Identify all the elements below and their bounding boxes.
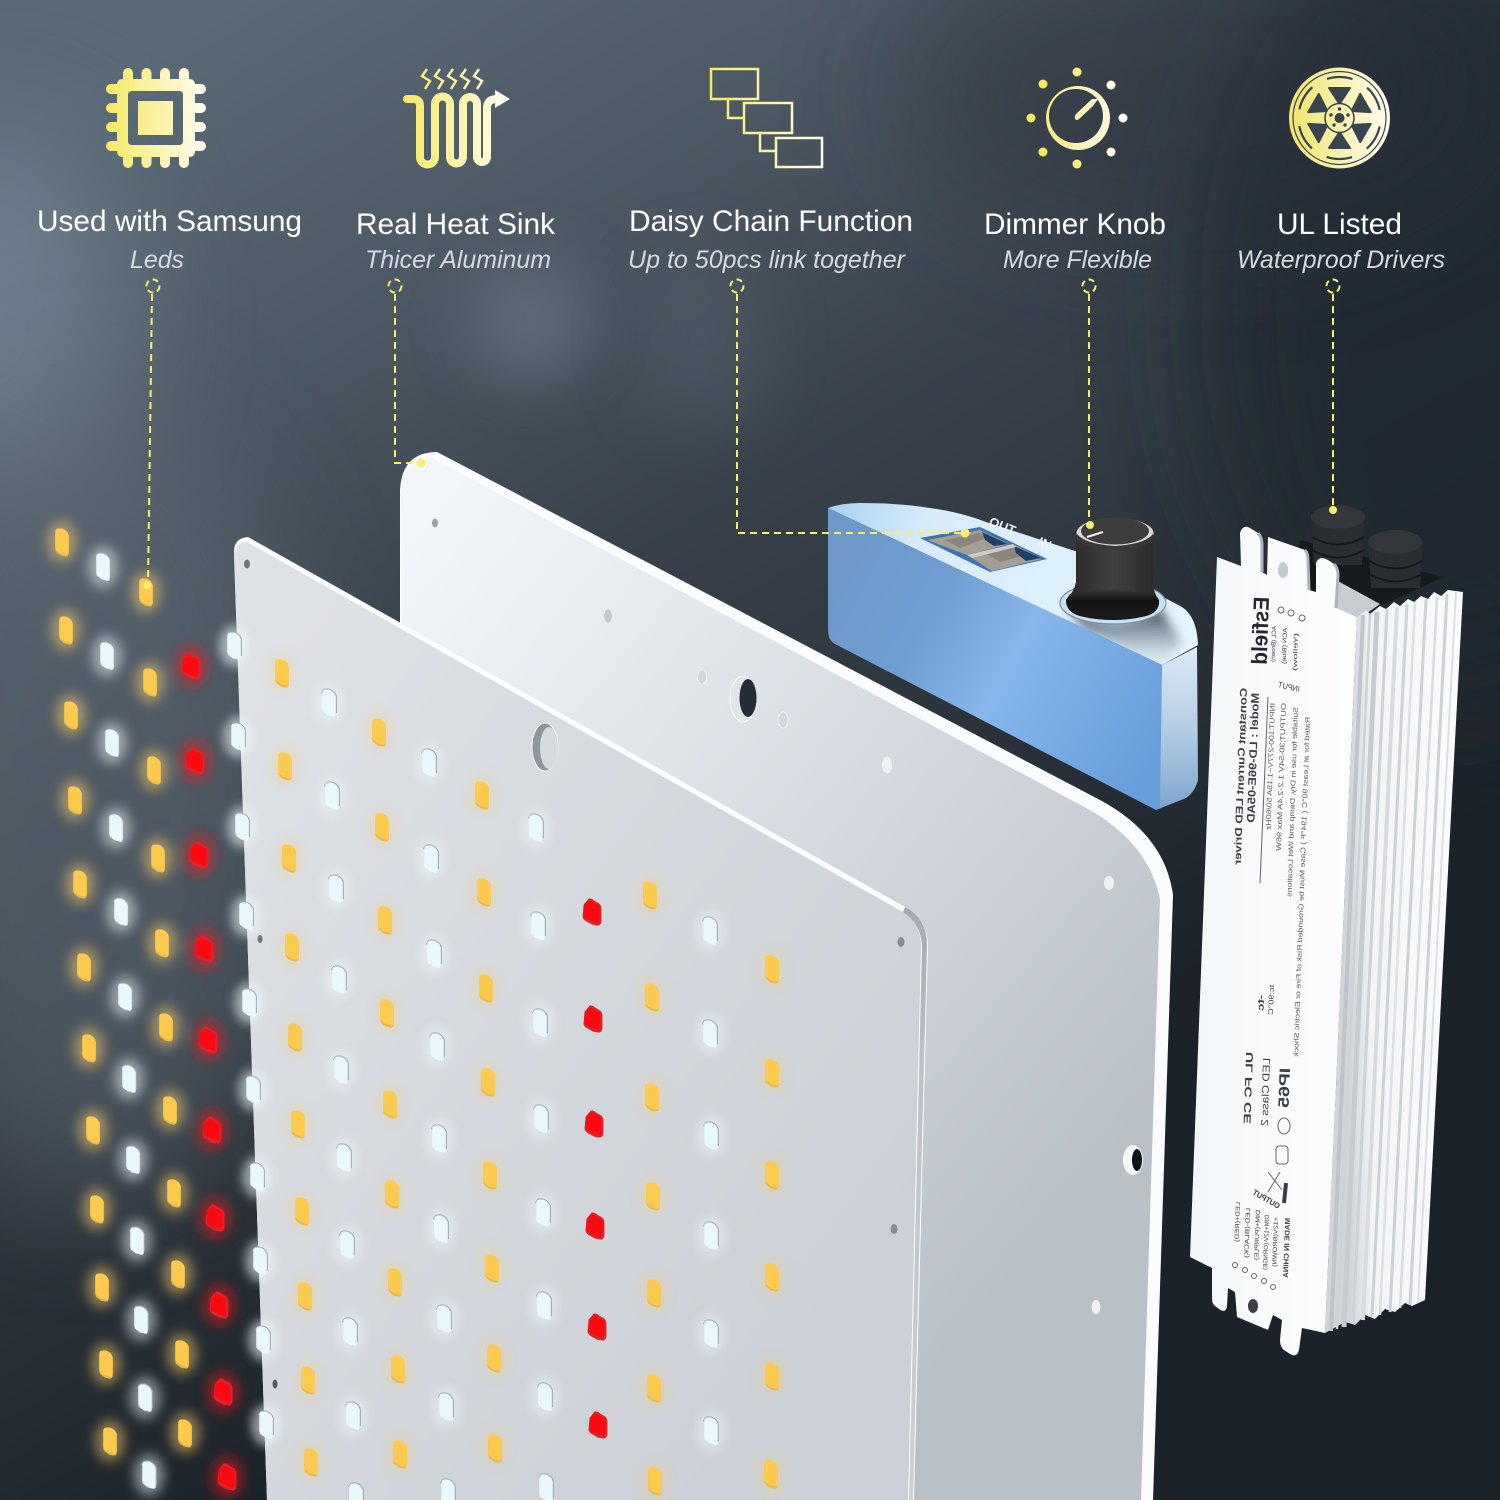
heading: UL Listed: UL Listed bbox=[1277, 208, 1402, 241]
icon: wheel bbox=[1289, 68, 1390, 168]
front panel holes bbox=[244, 560, 904, 1388]
panel LEDs bbox=[275, 660, 779, 1500]
driver label text: IP65 bbox=[1276, 1068, 1294, 1108]
leader: daisy chain bbox=[730, 280, 968, 536]
driver label text: Esfield bbox=[1247, 596, 1274, 665]
LED driver bbox=[1190, 505, 1463, 1355]
ethernet ports bbox=[920, 527, 1047, 572]
driver label text: OUTPUT:30-54V 1.2-2.4A Max 96W bbox=[1276, 703, 1288, 851]
driver label text: DIM+(PURPLE) bbox=[1254, 1210, 1262, 1260]
mounting hole bottom bbox=[1248, 1299, 1258, 1313]
LEDs floating left of panel bbox=[47, 521, 243, 1498]
controller top face bbox=[828, 503, 1198, 665]
leader: heat sink bbox=[388, 280, 424, 466]
heading: Dimmer Knob: Dimmer Knob bbox=[984, 208, 1166, 241]
icon: dimmer knob bbox=[1026, 68, 1128, 168]
subheading: More Flexible: More Flexible bbox=[1003, 246, 1152, 274]
controller side face bbox=[1156, 647, 1198, 810]
front LED panel bbox=[219, 537, 928, 1500]
driver label text bbox=[1233, 596, 1312, 1278]
driver label text: INPUT:100-277V~1.15A 50/60Hz bbox=[1266, 703, 1277, 831]
controller front face bbox=[828, 508, 1162, 810]
leader: dimmer knob bbox=[1082, 280, 1096, 528]
knob base ring bbox=[1060, 582, 1166, 624]
driver label text: LED+(RED) bbox=[1235, 1202, 1242, 1242]
blue controller box bbox=[828, 503, 1198, 810]
driver metal shoulder bbox=[1334, 580, 1380, 618]
rear panel holes bbox=[432, 518, 1143, 1314]
driver label text: INPUT bbox=[1277, 680, 1301, 694]
driver label marks bbox=[1232, 607, 1305, 1290]
driver connector block bbox=[1296, 540, 1443, 606]
driver label text: -tc bbox=[1255, 995, 1266, 1011]
heading: Daisy Chain Function: Daisy Chain Function bbox=[629, 205, 913, 238]
driver label text: ACN (Blue) bbox=[1282, 628, 1289, 664]
driver label text: tc:90°C bbox=[1267, 985, 1276, 1015]
panel LED glow bbox=[314, 682, 726, 1452]
driver label text: ACL (Brown) bbox=[1271, 626, 1278, 662]
icon: heat sink bbox=[407, 69, 510, 164]
front panel right bevel bbox=[903, 907, 927, 1500]
port labels: OUT bbox=[987, 514, 1018, 538]
driver label text: (Yellow) bbox=[1293, 633, 1300, 671]
edge LEDs on panel boundary bbox=[219, 625, 281, 1446]
heading: Real Heat Sink: Real Heat Sink bbox=[356, 208, 556, 241]
leader: drivers bbox=[1326, 280, 1340, 513]
driver label plate bbox=[1190, 527, 1357, 1355]
front panel top edge highlight bbox=[234, 537, 928, 1500]
driver label text: Suitable for use in Dry, Damp and Wet Locations bbox=[1286, 707, 1300, 898]
LED glow halos, floating bbox=[47, 521, 243, 1498]
callout leader lines bbox=[144, 280, 1340, 588]
driver label text: MADE IN CHINA bbox=[1283, 1218, 1292, 1278]
panel yellow LED glow bbox=[267, 652, 787, 1500]
subheading: Waterproof Drivers: Waterproof Drivers bbox=[1237, 246, 1445, 274]
rear heat sink panel bbox=[400, 452, 1173, 1500]
blue controller box: IN bbox=[1036, 534, 1054, 553]
driver label text: Constant Current LED Driver bbox=[1233, 688, 1250, 865]
driver cable gland 2 bbox=[1368, 530, 1423, 588]
subheading: Up to 50pcs link together: Up to 50pcs link together bbox=[628, 246, 907, 274]
dimmer knob bbox=[1066, 518, 1159, 620]
subheading: Thicer Aluminum: Thicer Aluminum bbox=[365, 246, 551, 274]
driver label text: LED-(BLACK) bbox=[1244, 1208, 1252, 1258]
icon: chip bbox=[111, 73, 201, 163]
driver label text: OUTPUT bbox=[1251, 1188, 1282, 1211]
driver label text: DIM+12V-(ORNGE) bbox=[1263, 1215, 1271, 1270]
rear panel white edge bbox=[400, 452, 1173, 1500]
shade under knob bbox=[1068, 608, 1182, 668]
icon: daisy chain bbox=[711, 69, 822, 167]
driver cable gland 1 bbox=[1311, 505, 1365, 565]
mounting hole top bbox=[1278, 562, 1288, 578]
driver label text: Rated for at Least 90°C ( 194°F ) Case Must be Grounded Risk of Fire or Electric Shock bbox=[1292, 717, 1312, 1057]
heading: Used with Samsung: Used with Samsung bbox=[37, 205, 302, 238]
driver label text: Model : LD-96E-05AD bbox=[1245, 693, 1262, 823]
driver label text: UL FC CE bbox=[1242, 1052, 1256, 1125]
rear panel face bbox=[401, 458, 1160, 1500]
driver tab bevels bbox=[1258, 533, 1338, 608]
leader: Samsung LEDs bbox=[144, 280, 160, 588]
front panel face bbox=[234, 542, 921, 1500]
subheading: Leds: Leds bbox=[130, 246, 184, 274]
driver label text: LED Class 2 bbox=[1260, 1058, 1273, 1127]
driver label text: +12V(BROWN) bbox=[1272, 1217, 1280, 1267]
aluminium fins bbox=[1325, 590, 1463, 1333]
